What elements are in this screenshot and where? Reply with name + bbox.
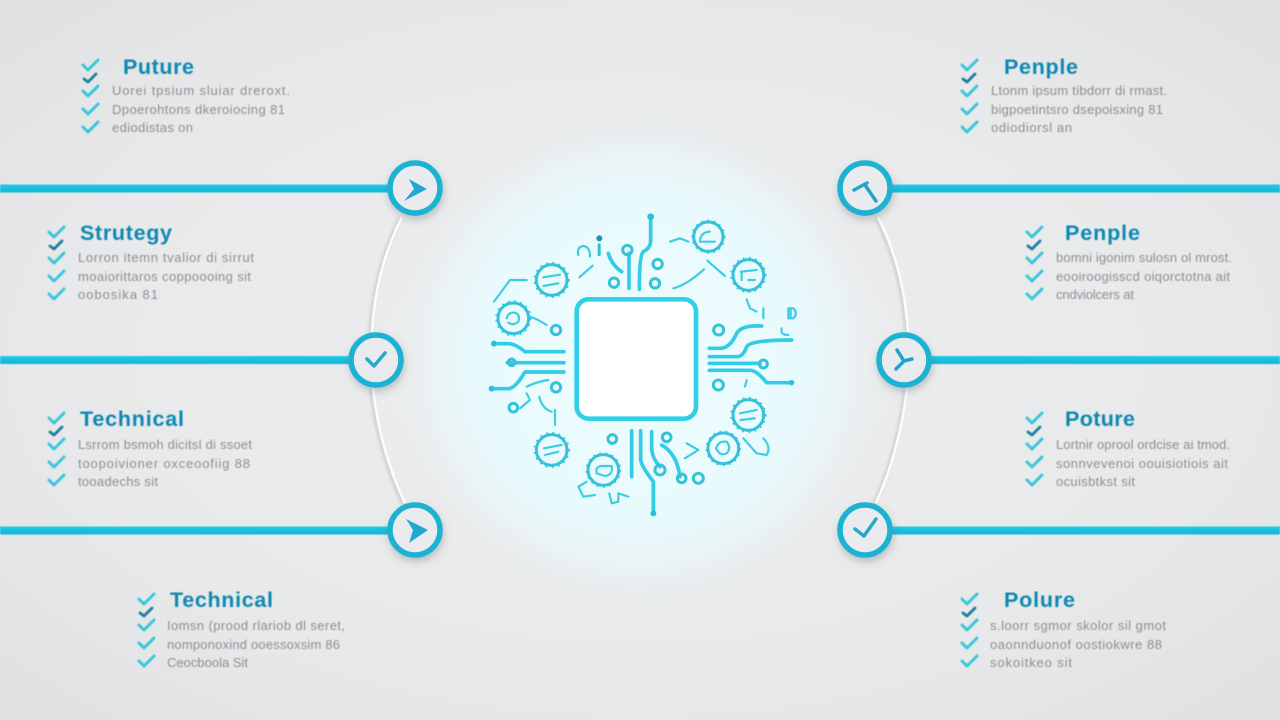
- block: Strutegy (left): [49, 221, 254, 302]
- checklist icons: [962, 60, 977, 132]
- body text: Uorei tpsium sluiar dreroxt.: [112, 83, 290, 98]
- chip body: [577, 299, 696, 419]
- body text: sonnvevenoi oouisiotiois ait: [1056, 456, 1228, 471]
- heading: Technical: [80, 407, 184, 431]
- body text: Lorron itemn tvalior di sirrut: [78, 250, 254, 265]
- left traces: [492, 344, 564, 389]
- body text: [1056, 437, 1230, 489]
- checklist icons: [139, 594, 154, 666]
- heading: Penple: [1004, 55, 1078, 79]
- heading: Strutegy: [80, 221, 172, 245]
- curved rails: [372, 217, 908, 503]
- body text: tooadechs sit: [78, 474, 158, 489]
- body text: [991, 83, 1167, 135]
- body text: [78, 250, 254, 302]
- block: Technical (left): [49, 407, 252, 489]
- body text: cndviolcers at: [1056, 287, 1134, 302]
- body text: oobosika 81: [78, 287, 158, 302]
- body text: Lsrrom bsmoh dicitsl di ssoet: [78, 437, 252, 452]
- node: right top tool: [840, 163, 890, 213]
- block: People (right): [1027, 221, 1232, 302]
- body text: bomni igonim sulosn ol mrost.: [1056, 250, 1232, 265]
- checklist icons: [1027, 227, 1042, 299]
- body text: toopoivioner oxceoofiig 88: [78, 456, 250, 471]
- gear nodes: [496, 220, 766, 487]
- body text: [78, 437, 252, 489]
- top traces: [608, 217, 651, 289]
- bottom traces: [632, 431, 680, 513]
- body text: [1056, 250, 1232, 302]
- checklist icons: [83, 60, 98, 132]
- heading: Puture: [123, 55, 194, 79]
- body text: ocuisbtkst sit: [1056, 474, 1135, 489]
- body text: Ceocboola Sit: [167, 655, 248, 670]
- body text: eooiroogisscd oiqorctotna ait: [1056, 269, 1230, 284]
- right traces: [709, 326, 792, 383]
- body text: Dpoerohtons dkeroiocing 81: [112, 102, 285, 117]
- checklist icons: [49, 227, 64, 299]
- body text: moaiorittaros coppoooing sit: [78, 269, 251, 284]
- node: left top arrow: [390, 163, 440, 213]
- body text: s.loorr sgmor skolor sil gmot: [990, 618, 1166, 633]
- body text: Ltonm ipsum tibdorr di rmast.: [991, 83, 1167, 98]
- node: left bottom arrow: [390, 505, 440, 555]
- heading: Technical: [170, 588, 273, 612]
- trace end dots: [489, 213, 794, 516]
- checklist icons: [49, 413, 64, 485]
- body text: bigpoetintsro dsepoisxing 81: [991, 102, 1163, 117]
- connector lines: [0, 184, 1280, 534]
- block: Technical (bottom left): [139, 588, 345, 670]
- central circuit chip icon: [489, 213, 796, 516]
- body text: Lortnir oprool ordcise ai tmod.: [1056, 437, 1230, 452]
- body text: [167, 618, 345, 670]
- body text: ediodistas on: [112, 120, 193, 135]
- body text: sokoitkeo sit: [990, 655, 1072, 670]
- body text: [112, 83, 290, 135]
- checklist icons: [1027, 413, 1042, 485]
- small circuit fragments: [494, 238, 796, 503]
- block: Puture (top left): [83, 55, 290, 135]
- body text: nomponoxind ooessoxsim 86: [167, 637, 340, 652]
- block: Polure (bottom right): [962, 588, 1166, 670]
- node: right bottom check: [840, 505, 890, 555]
- heading: Poture: [1065, 407, 1135, 431]
- block: People (top right): [962, 55, 1167, 135]
- central glow: [395, 115, 885, 605]
- node: right middle arrow: [879, 335, 929, 385]
- body text: odiodiorsl an: [991, 120, 1072, 135]
- heading: Polure: [1004, 588, 1075, 612]
- node: left middle check: [351, 335, 401, 385]
- body text: Iomsn (prood rlariob dl seret,: [167, 618, 345, 633]
- body text: [990, 618, 1166, 670]
- block: Puture (right): [1027, 407, 1230, 489]
- heading: Penple: [1065, 221, 1140, 245]
- gear inner marks: [507, 232, 757, 476]
- body text: oaonnduonof oostiokwre 88: [990, 637, 1162, 652]
- checklist icons: [962, 594, 977, 666]
- small ring nodes: [508, 245, 767, 483]
